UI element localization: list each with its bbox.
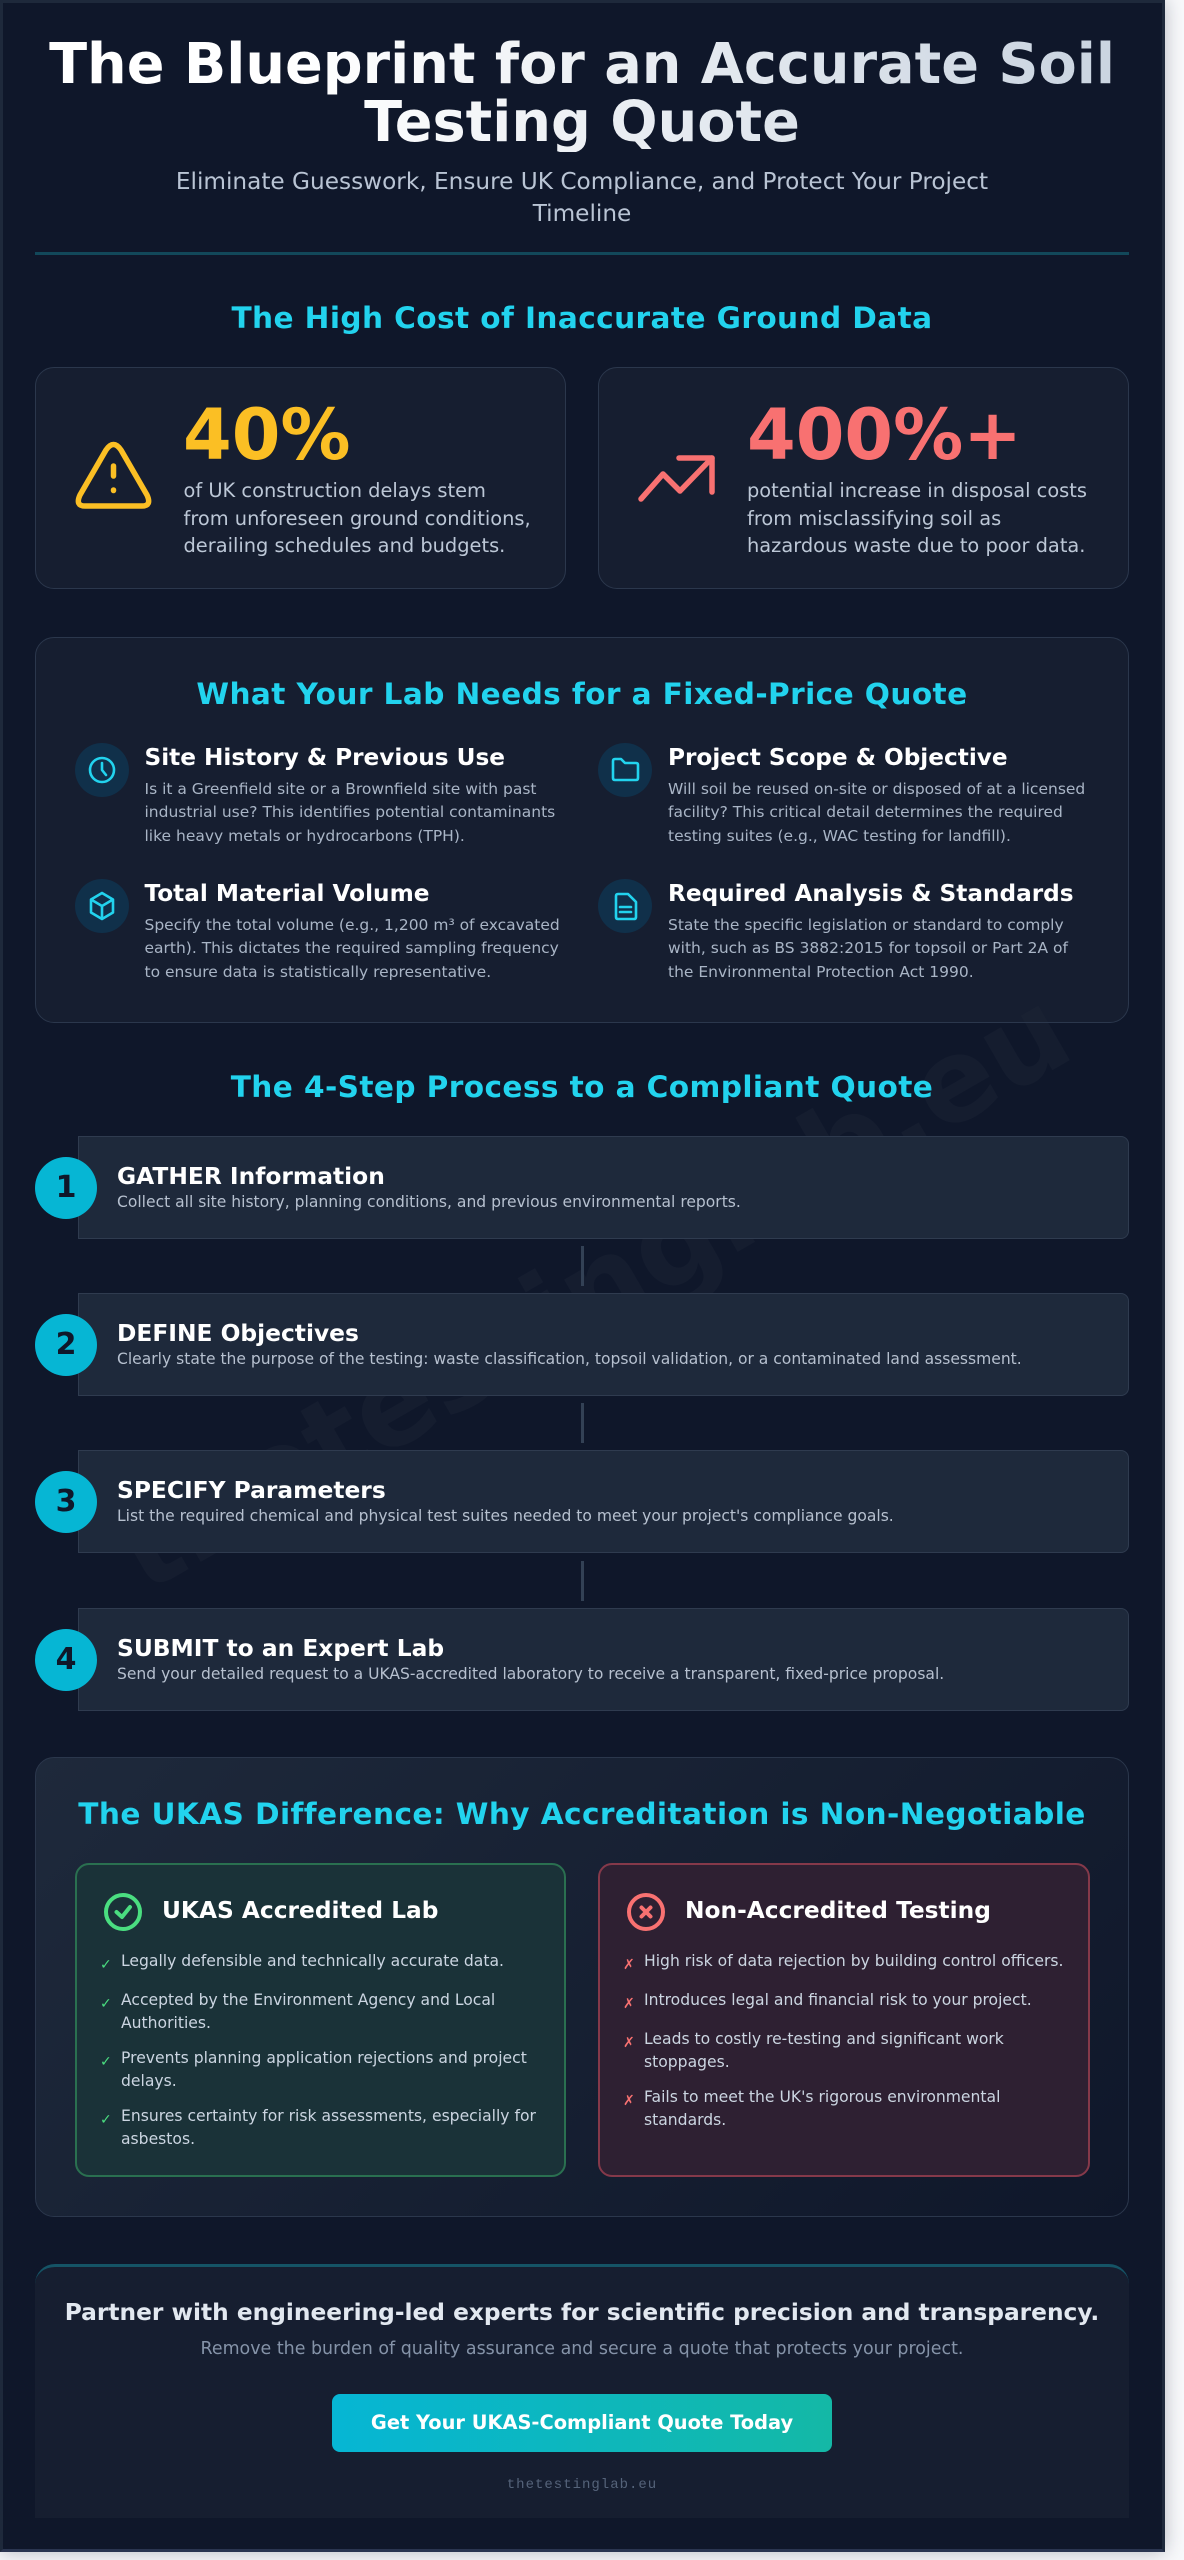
item text: testing suites (e.g., WAC testing for landfill). bbox=[668, 827, 1011, 845]
step 1 number bbox=[35, 1157, 97, 1219]
item text bbox=[668, 780, 1085, 845]
accredited list: Prevents planning application rejections and project bbox=[121, 2049, 527, 2067]
item text: Is it a Greenfield site or a Brownfield site with past bbox=[144, 780, 536, 798]
panel: lab needs bbox=[35, 637, 1129, 1023]
panel: stat 40% bbox=[35, 367, 566, 589]
item text: the Environmental Protection Act 1990. bbox=[668, 963, 974, 981]
accredited list: ✓ bbox=[100, 2054, 112, 2070]
item text bbox=[144, 916, 560, 981]
accredited list: Accepted by the Environment Agency and Local bbox=[121, 1991, 495, 2009]
item text: State the specific legislation or standard to comply bbox=[668, 916, 1064, 934]
step 3 card bbox=[78, 1450, 1129, 1553]
item text: facility? This critical detail determines the required bbox=[668, 803, 1063, 821]
step 2 title: DEFINE Objectives bbox=[117, 1319, 359, 1347]
item text: with, such as BS 3882:2015 for topsoil or Part 2A of bbox=[668, 939, 1068, 957]
footer url: thetestinglab.eu bbox=[507, 2477, 657, 2493]
stat text: of UK construction delays stem bbox=[184, 479, 486, 502]
non-accredited list: Fails to meet the UK's rigorous environmental bbox=[644, 2088, 1000, 2106]
card: non-accredited bbox=[598, 1863, 1090, 2177]
stat text bbox=[184, 479, 531, 557]
stat number 40%: 40% bbox=[183, 394, 351, 476]
CTA button bbox=[332, 2394, 832, 2452]
subtitle: Timeline bbox=[533, 200, 631, 227]
subtitle: Eliminate Guesswork, Ensure UK Compliance, and Protect Your Project bbox=[176, 168, 988, 195]
panel: UKAS difference bbox=[35, 1757, 1129, 2217]
step 1 title: GATHER Information bbox=[117, 1162, 385, 1190]
accredited list: delays. bbox=[121, 2072, 177, 2090]
step 3 number bbox=[35, 1471, 97, 1533]
watermark: thetestinglab.eu bbox=[92, 964, 1092, 1618]
item text bbox=[668, 916, 1068, 981]
step 2 text: Clearly state the purpose of the testing: waste classification, topsoil validation, or a contaminated land assessment. bbox=[117, 1350, 1022, 1368]
card: accredited bbox=[75, 1863, 566, 2177]
non-accredited list: ✗ bbox=[623, 1996, 635, 2012]
non-accredited list: Introduces legal and financial risk to your project. bbox=[644, 1991, 1032, 2009]
item text: earth). This dictates the required sampling frequency bbox=[144, 939, 559, 957]
title bbox=[30, 36, 1134, 152]
heading: lab needs: What Your Lab Needs for a Fixed-Price Quote bbox=[196, 677, 968, 711]
non-accredited list: standards. bbox=[644, 2111, 726, 2129]
stat text: derailing schedules and budgets. bbox=[184, 534, 505, 557]
stat text: from misclassifying soil as bbox=[747, 507, 1001, 530]
item heading: Required Analysis & Standards bbox=[668, 880, 1074, 907]
stat text: hazardous waste due to poor data. bbox=[747, 534, 1085, 557]
accredited list: ✓ bbox=[100, 1957, 112, 1973]
step 1 card bbox=[78, 1136, 1129, 1239]
accredited list: asbestos. bbox=[121, 2130, 195, 2148]
non-accredited list: ✗ bbox=[623, 1957, 635, 1973]
item heading: Project Scope & Objective bbox=[668, 744, 1008, 771]
non-accredited list: ✗ bbox=[623, 2035, 635, 2051]
icon: clock bbox=[75, 743, 129, 797]
step 2 number: 2 bbox=[56, 1327, 76, 1362]
non-accredited list: Leads to costly re-testing and significant work bbox=[644, 2030, 1004, 2048]
connector bbox=[581, 1246, 584, 1286]
non-accredited list: stoppages. bbox=[644, 2053, 730, 2071]
step 3 title: SPECIFY Parameters bbox=[117, 1476, 386, 1504]
item text bbox=[144, 780, 555, 845]
non-accredited list bbox=[623, 1952, 1064, 2129]
title: The Blueprint for an Accurate Soil bbox=[49, 32, 1115, 97]
CTA heading: Partner with engineering-led experts for scientific precision and transparency. bbox=[65, 2299, 1099, 2326]
item heading: Total Material Volume bbox=[144, 880, 429, 907]
heading: high cost: The High Cost of Inaccurate Ground Data bbox=[231, 301, 933, 335]
item text: Specify the total volume (e.g., 1,200 m³ of excavated bbox=[144, 916, 560, 934]
accredited heading: UKAS Accredited Lab bbox=[162, 1897, 438, 1924]
icon: folder bbox=[598, 743, 652, 797]
accredited list bbox=[100, 1952, 536, 2148]
non-accredited list: High risk of data rejection by building control officers. bbox=[644, 1952, 1064, 1970]
panel: call to action bbox=[35, 2264, 1129, 2518]
stat text: potential increase in disposal costs bbox=[747, 479, 1087, 502]
item text: to ensure data is statistically representative. bbox=[144, 963, 491, 981]
step 1 number: 1 bbox=[56, 1170, 76, 1205]
heading: UKAS difference: The UKAS Difference: Why Accreditation is Non-Negotiable bbox=[78, 1797, 1086, 1831]
non-accredited heading: Non-Accredited Testing bbox=[685, 1897, 991, 1924]
stat text bbox=[747, 479, 1087, 557]
connector bbox=[581, 1403, 584, 1443]
item text: industrial use? This identifies potential contaminants bbox=[144, 803, 555, 821]
step 4 text: Send your detailed request to a UKAS-accredited laboratory to receive a transparent, fixed-price proposal. bbox=[117, 1665, 944, 1683]
title: Testing Quote bbox=[364, 90, 800, 155]
step 4 number: 4 bbox=[56, 1642, 76, 1677]
icon: box bbox=[75, 879, 129, 933]
accredited list: ✓ bbox=[100, 2112, 112, 2128]
step 2 number bbox=[35, 1314, 97, 1376]
connector bbox=[581, 1561, 584, 1601]
subtitle bbox=[176, 168, 988, 227]
step 2 card bbox=[78, 1293, 1129, 1396]
icon: document bbox=[598, 879, 652, 933]
item heading: Site History & Previous Use bbox=[144, 744, 505, 771]
accredited list: Legally defensible and technically accurate data. bbox=[121, 1952, 504, 1970]
accredited list: Ensures certainty for risk assessments, especially for bbox=[121, 2107, 536, 2125]
step 4 number bbox=[35, 1629, 97, 1691]
step 4 card bbox=[78, 1608, 1129, 1711]
stat number 400%+: 400%+ bbox=[747, 394, 1022, 476]
step 3 text: List the required chemical and physical test suites needed to meet your project's compliance goals. bbox=[117, 1507, 894, 1525]
CTA button: Get Your UKAS-Compliant Quote Today bbox=[371, 2411, 793, 2434]
stat text: from unforeseen ground conditions, bbox=[184, 507, 531, 530]
accredited list: ✓ bbox=[100, 1996, 112, 2012]
heading: process: The 4-Step Process to a Compliant Quote bbox=[231, 1070, 933, 1104]
step 1 text: Collect all site history, planning conditions, and previous environmental reports. bbox=[117, 1193, 741, 1211]
non-accredited list: ✗ bbox=[623, 2093, 635, 2109]
item text: like heavy metals or hydrocarbons (TPH). bbox=[144, 827, 465, 845]
panel: stat 400% bbox=[598, 367, 1129, 589]
accredited list: Authorities. bbox=[121, 2014, 211, 2032]
CTA subtext: Remove the burden of quality assurance and secure a quote that protects your project. bbox=[201, 2339, 963, 2359]
item text: Will soil be reused on-site or disposed of at a licensed bbox=[668, 780, 1085, 798]
step 4 title: SUBMIT to an Expert Lab bbox=[117, 1634, 444, 1662]
step 3 number: 3 bbox=[56, 1484, 76, 1519]
